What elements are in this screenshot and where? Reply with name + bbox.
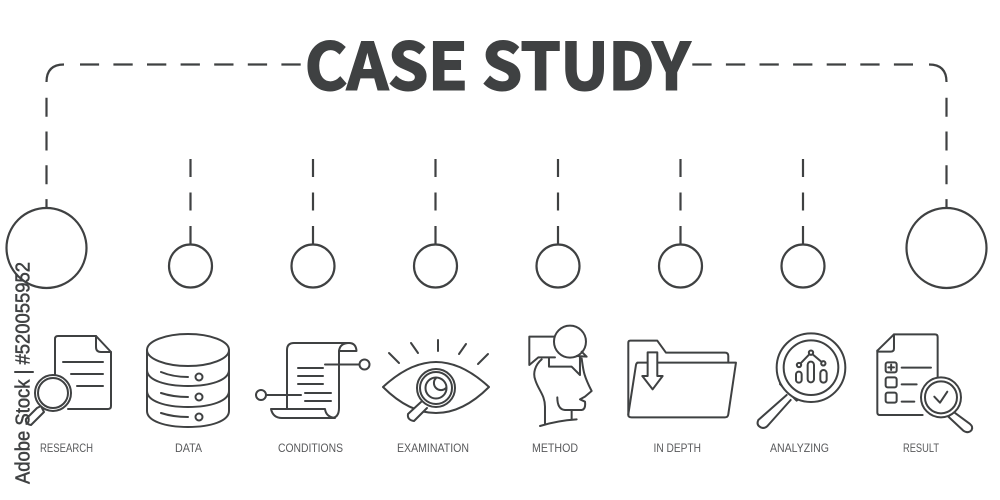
label: research: RESEARCH [40, 441, 93, 455]
label: method: METHOD [532, 441, 578, 455]
icon: research [26, 336, 111, 425]
icon: method [529, 326, 592, 426]
small node 3 [414, 159, 457, 288]
small node 2 [292, 159, 334, 288]
label: examination: EXAMINATION [397, 441, 469, 455]
icon: in depth folder [628, 341, 736, 417]
small node 4 [536, 159, 580, 288]
icon: result [877, 334, 972, 432]
label: data: DATA [175, 441, 202, 455]
icon: conditions [256, 343, 370, 418]
label: in depth: IN DEPTH [654, 441, 701, 455]
icon: data [147, 334, 229, 427]
stock id vertical text: Adobe Stock | #520055952 [12, 262, 34, 484]
title: CASE STUDY [305, 16, 691, 108]
label: result: RESULT [903, 441, 940, 455]
label: analyzing: ANALYZING [770, 441, 829, 455]
small node 1 [169, 159, 212, 288]
small node 6 [782, 159, 824, 288]
label: conditions: CONDITIONS [278, 441, 343, 455]
icon: analyzing [758, 333, 845, 428]
right dashed connector [692, 64, 946, 208]
large circle right [906, 208, 986, 288]
large circle left [6, 208, 86, 288]
left dashed connector [46, 64, 301, 208]
small node 5 [659, 159, 702, 288]
icon: examination [383, 340, 489, 421]
